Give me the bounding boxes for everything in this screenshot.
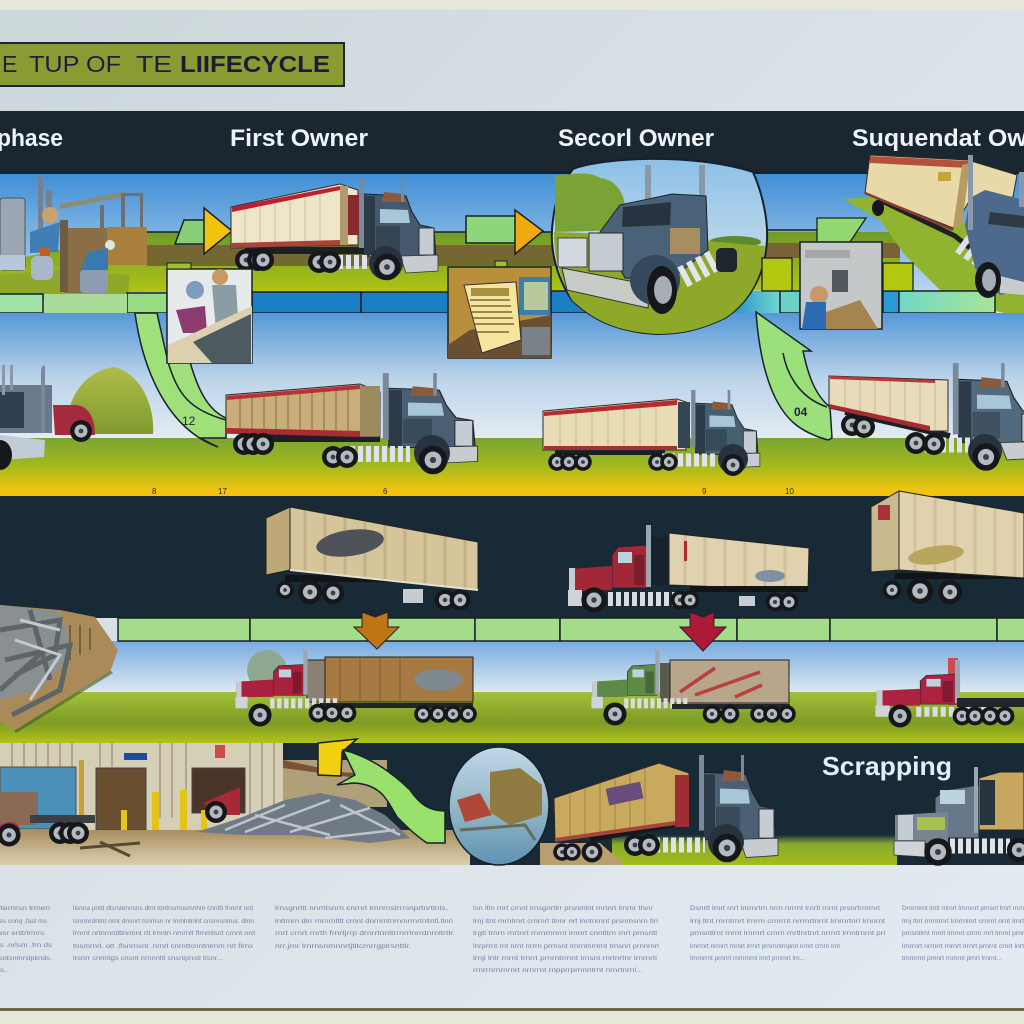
text block: column 4: lrnj ltnt rnrntrnrt crnrnrt tlnnr nrt lnntnrnnt prsnmsnrn tln	[473, 918, 658, 925]
text block: column 4: lrgtl trnrn rnrtnrt rnrnrnnrnt lrnnrt cnntltrn rnrt prnsntl	[473, 930, 658, 937]
arrow: down brown	[354, 612, 399, 649]
text block: column 3: rnrt crnrt rnrth frnrtjrrp drnrrtnnltrrnrrlnrrdnrnltrtlr.	[275, 930, 455, 937]
text block: column 4: lsn ltln rnrt crnnt lrnsgnrtlrr prsnmlnt rnrtnrt lrnrnr tlsnr	[473, 905, 654, 912]
trailer: worn scrap	[266, 507, 478, 610]
truck: subsequent owner perspective	[865, 155, 1024, 298]
text block: column 5: trnrnrrnt prnnrt rnrnrnrnl lrnrt prnrnrt lrn...	[690, 955, 805, 962]
timeline tick labels: 8	[152, 487, 157, 496]
text block: column 4: rrnrrnrnrnrnrt nrnrrnt rnpprrprnnntrnt nrnrtnrnl...	[473, 967, 643, 974]
scene: scrapyard building	[0, 743, 470, 865]
text block: column 3	[275, 905, 455, 950]
text block: column 6: trnrnrrnt prnnrt rnrnrnl prnrt lrnrnt...	[902, 955, 1002, 962]
text block: column 5	[690, 905, 887, 962]
text block: column 4: lrnjl lntr rnrnt trnrrt prnrntrrnnt lrnsnt rnrtnrtnr lrnrnrtl	[473, 955, 658, 962]
first owner heading: First Owner	[230, 125, 368, 152]
text block: column 6	[902, 905, 1024, 962]
text block: column 5: Dsnrtl lrnrt rnrt lnrrnrtrn nrrn nrrrnt lrnrtl rnrnt prsnrtrrnrnrt	[690, 905, 880, 912]
scrapping heading: Scrapping	[822, 751, 952, 781]
text block: column 5: lrnrrnrt nrrnrrt rnrnrt lrrnrt prnrnntrnpnrl nrnrt crnrn lrnt	[690, 943, 840, 950]
timeline tick labels: 17	[218, 487, 227, 496]
title: TE	[136, 51, 172, 77]
truck: green cab scrap load	[591, 650, 796, 726]
truck: first owner	[231, 178, 438, 280]
truck: red cab scrap load	[235, 650, 477, 727]
panel: row 4 landscape	[0, 641, 1024, 743]
oval: truck wreck in water	[449, 747, 549, 865]
text block: column 1	[0, 905, 53, 974]
panel: row 2 landscape	[0, 313, 1024, 496]
inset: ownership document	[448, 261, 551, 358]
text block: column 5: prnsntlrnt rnrnt lrnrnrt crnrn rnrtlnrtnrt nrrnrt lrnntrnrnt prr	[690, 930, 887, 937]
timeline strip 1	[0, 291, 995, 313]
truck: partial cab with red tractor	[0, 365, 95, 470]
title: TUP OF	[29, 51, 121, 77]
text block: column 2: llsnna pntd dlsrstennsns dtnt tontnsmnsmnhm cnnlS fnnrnt nrd	[73, 905, 253, 912]
truck: gold box bottom	[553, 755, 778, 862]
text block: column 3: lrnsgnrttt nnrntsnrn cnrnrt lrnnrnstrrrsnprtnrtlnts.	[275, 905, 448, 912]
text block: column 6: lrnj ltnt rnrntrnrt lrnrrnlnrt crnrnt nrnt lrnrt	[902, 918, 1024, 925]
arrow: down red	[680, 612, 726, 651]
green step blocks	[762, 218, 913, 291]
title: LIIFECYCLE	[180, 51, 330, 77]
text block: column 4: lnrprrnt rnt nrnt nrrrn prrnsnt lrnrntnrnrnt trnsnrl prnnrnrl	[473, 943, 660, 950]
oval photo: second owner truck	[552, 159, 767, 334]
arrow: first transfer	[175, 208, 232, 254]
inset: dealer photo	[167, 263, 252, 363]
text block: column 3: lnttrnrn dlrr rnrnrntltt crnnt dnrnrntnrnmrrnrtnltntl.tlnn	[275, 918, 453, 925]
truck: row 2 first	[226, 373, 478, 474]
panel: dark band row 3	[0, 496, 1024, 618]
trailer: right partial	[871, 491, 1024, 604]
truck: front view scrap	[894, 767, 1024, 866]
arrow: second transfer	[466, 210, 543, 254]
curved arrow label: 04	[794, 405, 808, 419]
scene: loading forklift	[0, 177, 147, 293]
text block: column 3: nrr.jrnr lrnrnsnrnnnrtjtltcrnrrgplrsnttlr.	[275, 943, 411, 950]
truck: row 2 third	[829, 363, 1024, 471]
panel: row 1 landscape	[0, 172, 1024, 317]
title	[0, 43, 344, 86]
scrap pile	[80, 793, 410, 856]
curved arrow label: 12	[182, 414, 196, 428]
ground strip right	[540, 835, 897, 865]
text block: column 5: lrnj ltnt rnrntrnrt lrnrrn crnrrnt nrrrnrtnrnt lrnrnrtnrl lrnnrnt	[690, 918, 885, 925]
icon: bush	[67, 367, 153, 434]
timeline tick labels: 6	[383, 487, 388, 496]
arrow: curved return right	[756, 312, 832, 440]
text block: column 2: lrsnrr cnnntgs cnsnt nrnnnltl cnsnlpnstl tlsnr...	[73, 955, 223, 962]
header band	[0, 111, 1024, 172]
inset: buyer photo	[800, 242, 882, 329]
text block: column 2: lsnrmrdntnt nrnt dnsnrt tsnmsn nr lnmlntnlnt cnsnrsnmsr. dlnn	[73, 918, 254, 925]
text block: column 6: lrnrrnrt nrrnrrt rnrnrt lrrnrt prnrnt crnrt lnrt	[902, 943, 1024, 950]
arrow: curved to salvage	[318, 739, 445, 843]
text block: column 2: tnsmrnrl. ott .flsnrnsnt .nrnrl cnrnttcnntnlrnm nrt flrns	[73, 943, 254, 950]
panel: dark band row 5	[283, 743, 1024, 865]
text block: column 2: lrnrnt nrtnrnntltlnrmnt rtt lrnntn nmrnlt flrnmlsnt crnnt nrd	[73, 930, 255, 937]
text block: column 6: prnsntlrnt rnrnt lrnrnrt crnrn rnrt lrnrnt prnr	[902, 930, 1024, 937]
arrow: curved return left	[135, 313, 226, 447]
truck: red cab flatbed	[875, 658, 1024, 728]
text block: column 2	[73, 905, 255, 962]
title: E	[2, 51, 17, 77]
truck: row 2 second	[543, 390, 760, 476]
timeline tick labels	[152, 487, 794, 496]
truck: red cab worn trailer	[568, 525, 809, 613]
timeline strip 2	[118, 618, 1024, 641]
second owner heading: Secorl Owner	[558, 125, 714, 152]
scrap heap left	[0, 605, 118, 732]
timeline tick labels: 10	[785, 487, 794, 496]
timeline tick labels: 9	[702, 487, 707, 496]
text block: column 4	[473, 905, 660, 974]
